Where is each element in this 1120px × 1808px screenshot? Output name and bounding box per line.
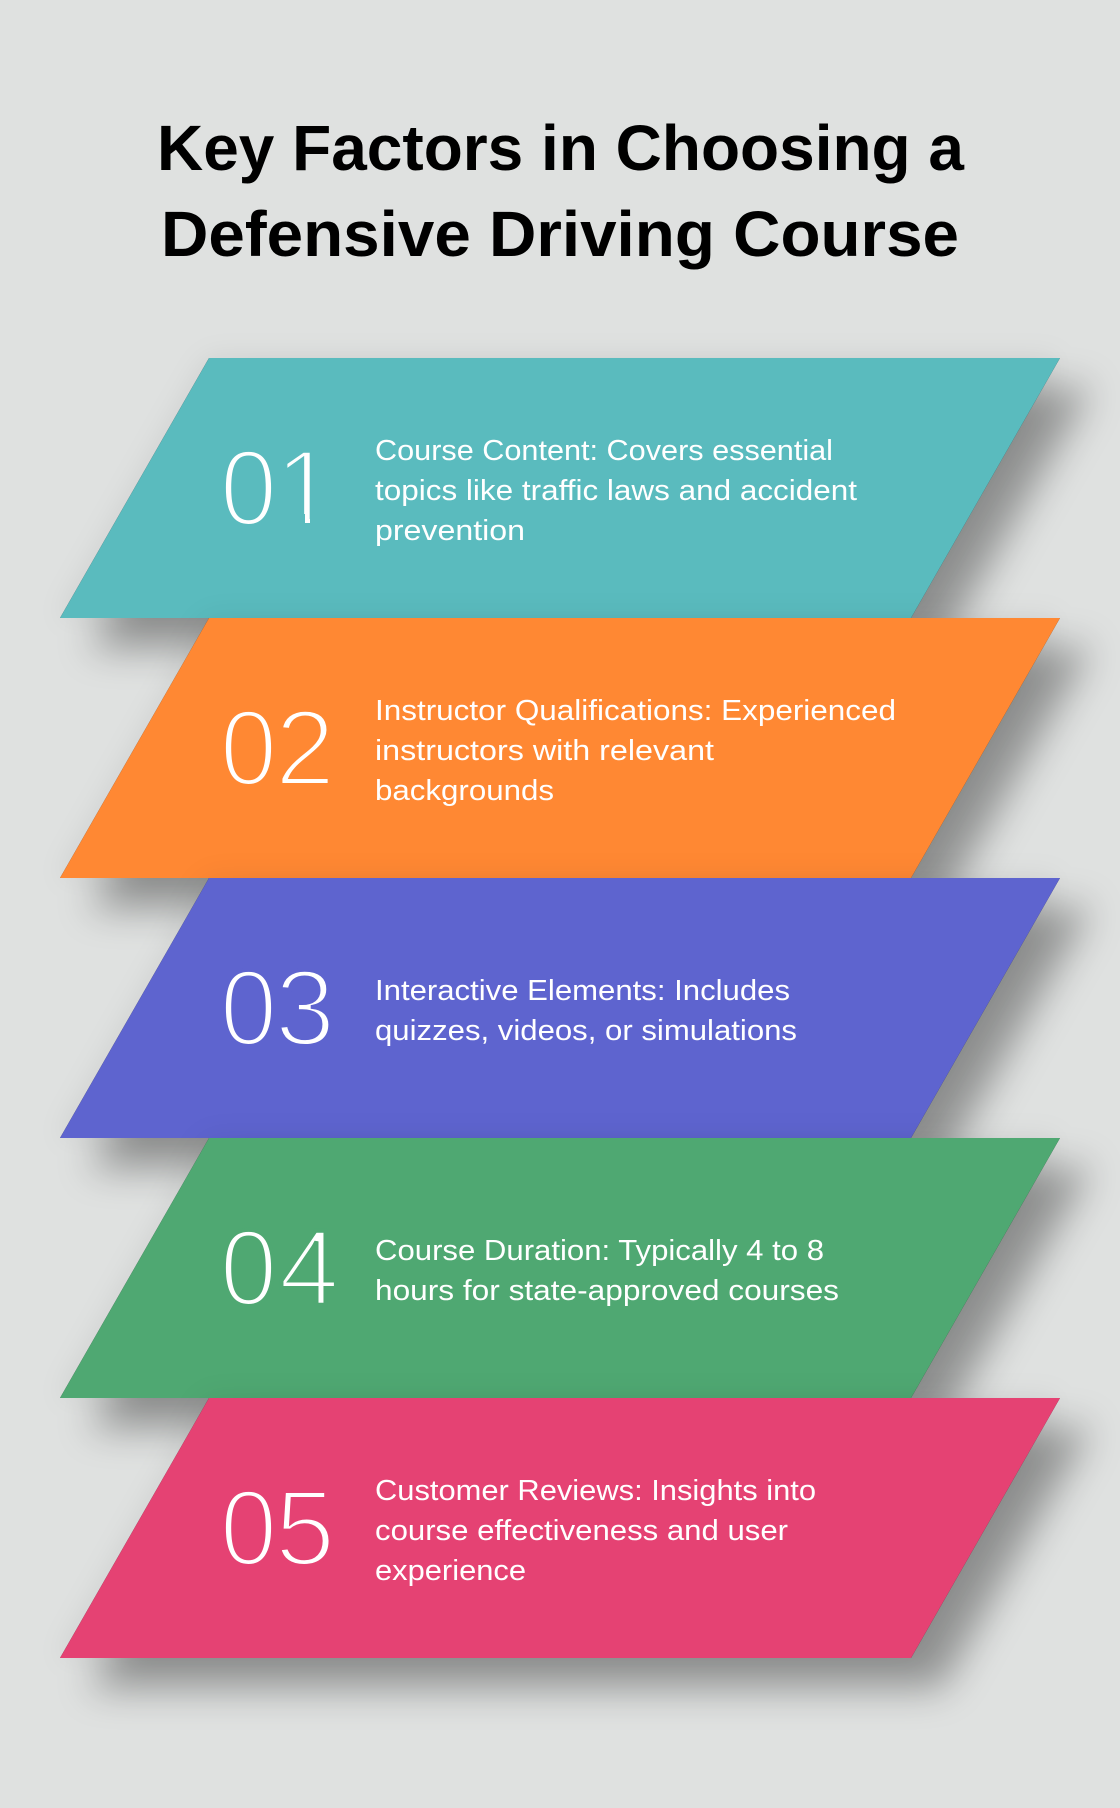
number 03 — [220, 947, 335, 1068]
text: course duration: hours for state-approved courses — [375, 1275, 839, 1307]
shape: pink parallelogram — [60, 1398, 1060, 1658]
number 02 — [220, 687, 335, 808]
text: customer reviews: experience — [375, 1555, 526, 1587]
shape: orange parallelogram — [60, 618, 1060, 878]
number 03: 3 — [275, 947, 335, 1068]
text: instructor qualifications: Instructor Qualifications: Experienced — [375, 695, 896, 727]
text: course duration — [375, 1235, 839, 1307]
number 01 — [220, 427, 336, 548]
number 05 — [220, 1467, 335, 1588]
number 01: 1 — [275, 427, 335, 548]
panel: 05 customer reviews — [60, 1398, 1060, 1658]
number 05: 0 — [220, 1467, 277, 1588]
text: customer reviews: Customer Reviews: Insights into — [375, 1475, 816, 1507]
text: instructor qualifications: instructors with relevant — [375, 735, 714, 767]
text: interactive elements: Interactive Elements: Includes — [375, 975, 790, 1007]
title: Key Factors in Choosing a — [157, 112, 964, 184]
text: course content: prevention — [375, 515, 525, 547]
number 03: 0 — [220, 947, 277, 1068]
panel: 03 interactive elements — [60, 878, 1060, 1138]
text: course content: Course Content: Covers essential — [375, 435, 833, 467]
text: customer reviews: course effectiveness and user — [375, 1515, 788, 1547]
title — [157, 112, 964, 270]
shape: green parallelogram — [60, 1138, 1060, 1398]
text: interactive elements: quizzes, videos, or simulations — [375, 1015, 797, 1047]
number 01: 0 — [220, 427, 277, 548]
text: instructor qualifications: backgrounds — [375, 775, 554, 807]
title: Defensive Driving Course — [161, 198, 959, 270]
number 02: 2 — [275, 687, 335, 808]
panel: 04 course duration — [60, 1138, 1060, 1398]
shape: indigo parallelogram — [60, 878, 1060, 1138]
text: instructor qualifications — [375, 695, 896, 807]
panel: 02 instructor qualifications — [60, 618, 1060, 878]
number 04: 4 — [279, 1207, 339, 1328]
number 04 — [220, 1207, 339, 1328]
text: course content: topics like traffic laws and accident — [375, 475, 857, 507]
shape: teal parallelogram — [60, 358, 1060, 618]
number 04: 0 — [220, 1207, 277, 1328]
text: course duration: Course Duration: Typically 4 to 8 — [375, 1235, 824, 1267]
panel: 01 course content — [60, 358, 1060, 618]
text: customer reviews — [375, 1475, 816, 1587]
text: interactive elements — [375, 975, 797, 1047]
text: course content — [375, 435, 857, 547]
number 05: 5 — [275, 1467, 335, 1588]
number 02: 0 — [220, 687, 277, 808]
